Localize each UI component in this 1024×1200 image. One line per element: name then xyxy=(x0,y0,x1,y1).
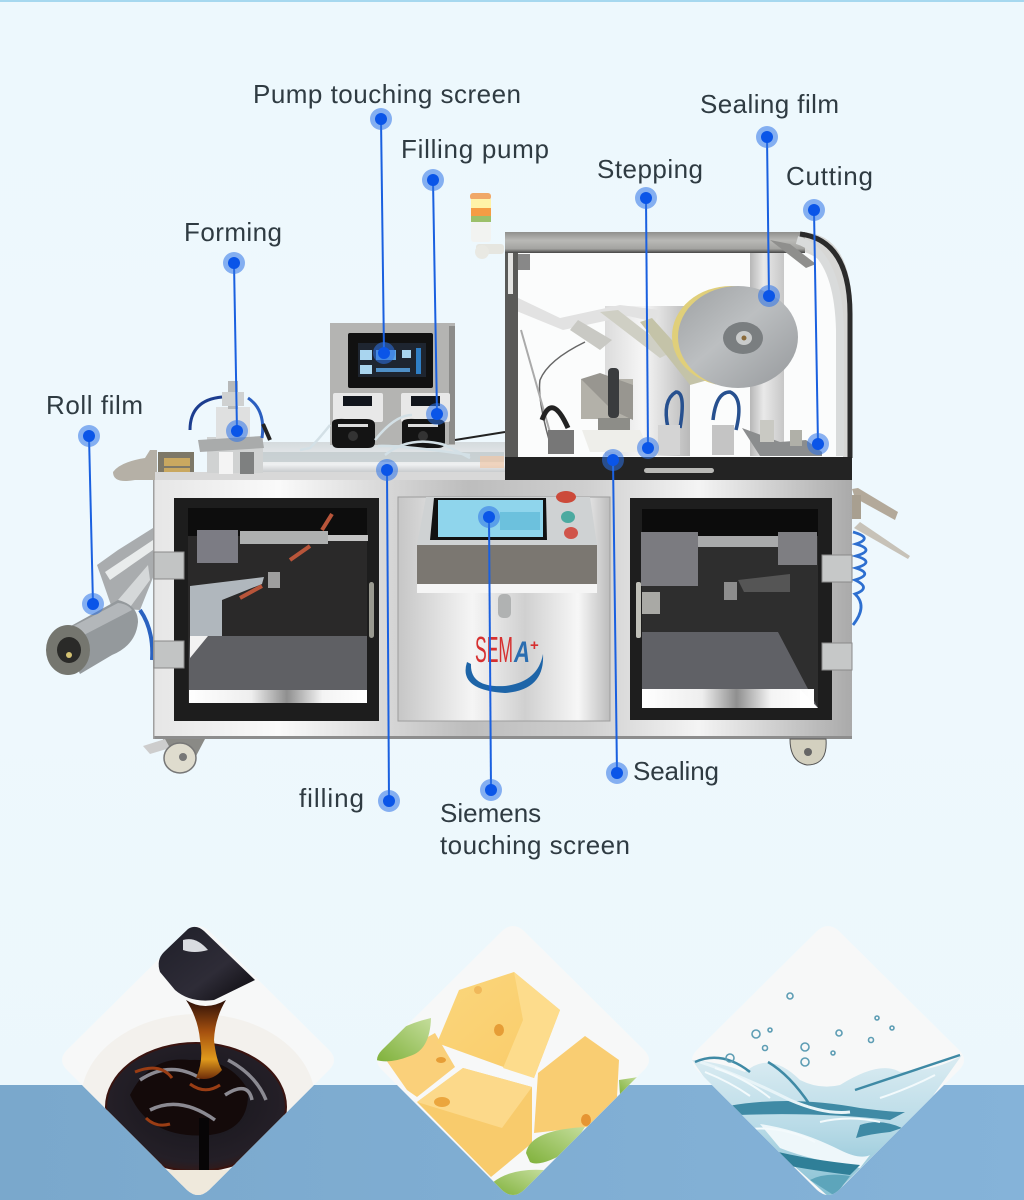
callout: Sealing: Sealing xyxy=(633,756,719,786)
diamond: water splash xyxy=(687,921,969,1200)
right door xyxy=(630,498,832,720)
callout: Sealing film: Sealing film xyxy=(700,89,839,119)
left hinges xyxy=(154,552,184,668)
top cheese cube xyxy=(437,972,560,1078)
syrup stream xyxy=(186,1000,226,1079)
machine illustration xyxy=(46,193,910,773)
callout: filling: filling xyxy=(299,783,364,813)
touch screen xyxy=(348,333,433,388)
left door xyxy=(174,498,379,721)
leaf xyxy=(526,1127,585,1164)
callout: Roll film xyxy=(46,390,143,615)
callout: Stepping: Stepping xyxy=(597,154,703,184)
siemens console xyxy=(417,491,597,593)
callout: Cutting xyxy=(786,161,873,455)
pump control panel xyxy=(300,323,505,458)
cover frame xyxy=(505,232,850,458)
callout: Forming: Forming xyxy=(184,217,282,247)
roll film spool xyxy=(46,528,154,675)
logo: SEM xyxy=(475,629,513,670)
blue bottom band xyxy=(0,1085,1024,1200)
right pump unit xyxy=(401,393,450,448)
callout: Siemens touching screen: Siemens xyxy=(440,798,541,828)
bowl and sauce xyxy=(81,1014,315,1200)
callout: Forming xyxy=(184,217,282,442)
callout: Filling pump: Filling pump xyxy=(401,134,549,164)
droplets xyxy=(726,993,894,1066)
casters xyxy=(143,739,826,773)
water body xyxy=(692,1055,962,1198)
sealing cover xyxy=(505,232,852,480)
diamond base xyxy=(57,921,339,1200)
callout: Roll film: Roll film xyxy=(46,390,143,420)
left bracket xyxy=(113,450,194,481)
air coil right xyxy=(853,532,866,625)
tower lamp xyxy=(470,193,504,259)
leaf xyxy=(492,1170,544,1196)
blue hoses xyxy=(658,392,739,455)
right hinges xyxy=(822,555,852,670)
sealing block xyxy=(542,368,650,454)
diamond: cheese xyxy=(372,921,654,1200)
callout: Stepping xyxy=(597,154,703,459)
cabinet body xyxy=(153,480,852,739)
centre panel xyxy=(398,497,610,721)
spoon xyxy=(159,927,255,1001)
leaf xyxy=(376,1018,431,1061)
logo: A xyxy=(513,636,530,669)
diamond: soy sauce xyxy=(57,921,339,1200)
spoon highlight xyxy=(183,939,208,952)
bottom black band xyxy=(505,457,852,480)
leaf xyxy=(619,1077,637,1094)
callout: filling xyxy=(299,459,400,813)
diamond base xyxy=(372,921,654,1200)
callout: Siemens touching screen: touching screen xyxy=(440,830,630,860)
left pump unit xyxy=(332,393,383,448)
callout: Cutting: Cutting xyxy=(786,161,873,191)
top edge line xyxy=(0,0,1024,2)
callout: Pump touching screen: Pump touching screen xyxy=(253,79,521,109)
logo: + xyxy=(530,637,539,654)
film arms xyxy=(514,296,708,450)
logo xyxy=(466,629,543,693)
callout: Siemens touching screen xyxy=(440,506,630,860)
levers right xyxy=(852,488,910,559)
film roll xyxy=(672,286,798,388)
diamond base xyxy=(687,921,969,1200)
cheese cubes xyxy=(376,1018,638,1196)
forming station xyxy=(190,381,270,474)
top deck xyxy=(155,442,506,480)
callout: Sealing xyxy=(602,449,719,786)
interior back wall xyxy=(605,252,784,456)
callout: Pump touching screen xyxy=(253,79,521,364)
tubes xyxy=(300,415,470,458)
callout: Filling pump xyxy=(401,134,549,425)
cutter xyxy=(742,420,822,456)
callout: Sealing film xyxy=(700,89,839,307)
